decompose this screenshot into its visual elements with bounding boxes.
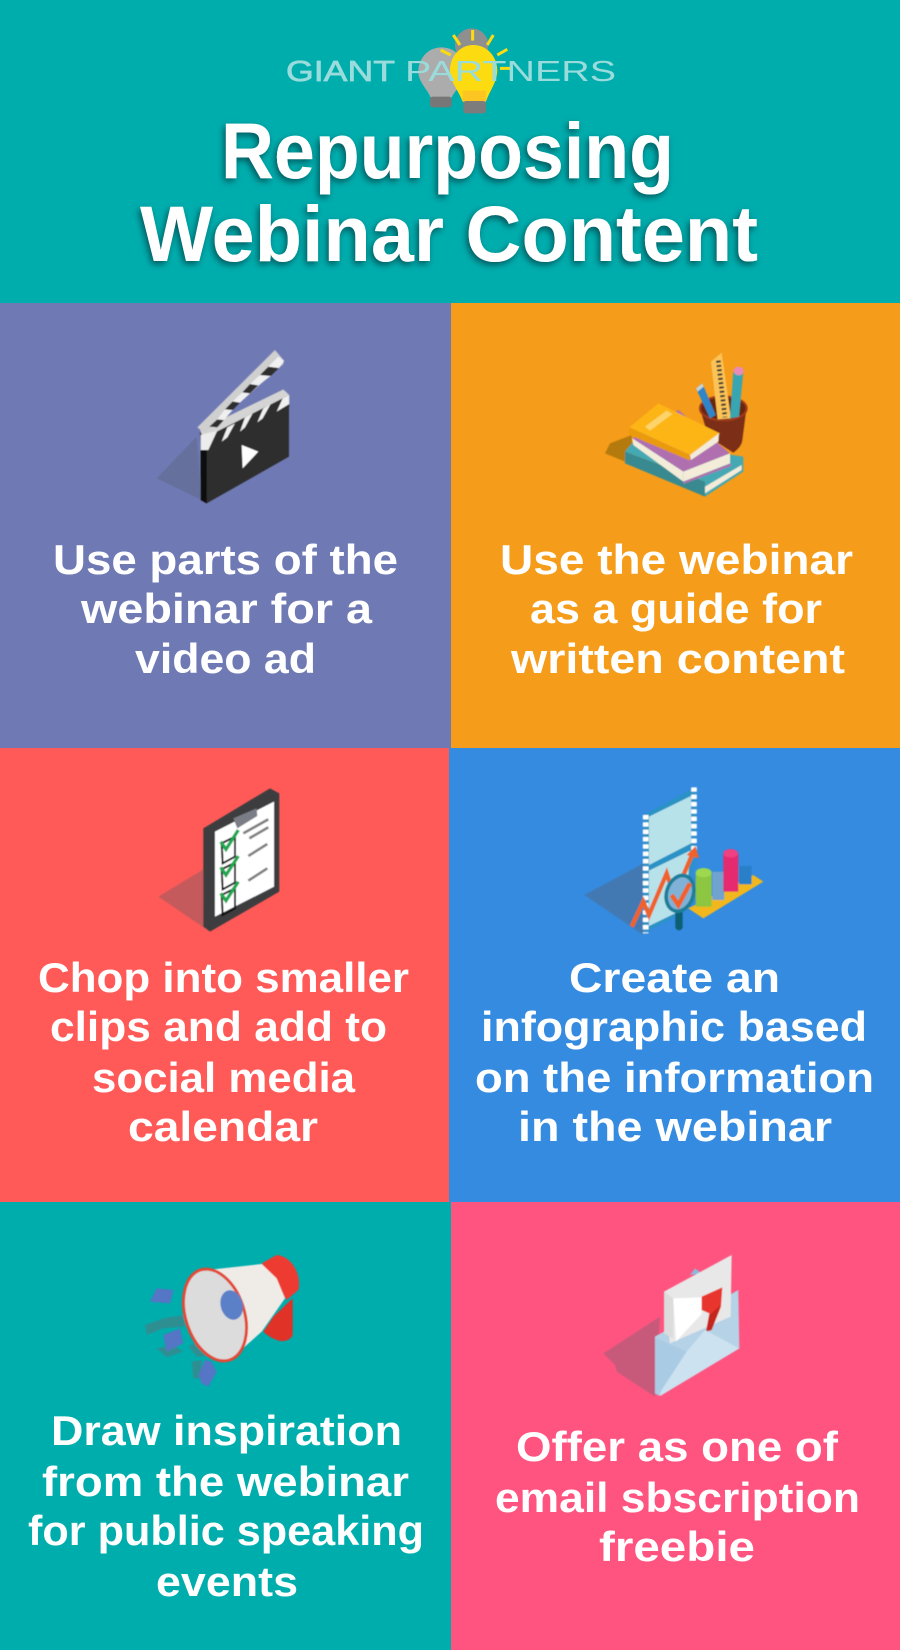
text: written content: written content [510, 635, 845, 682]
icon: checklist clipboard [158, 788, 279, 932]
text: video ad [53, 536, 398, 682]
text: public speaking: from the webinar [42, 1458, 409, 1505]
text: public speaking: for public speaking [28, 1507, 424, 1554]
icon: clapperboard [157, 350, 289, 503]
text: public speaking [28, 1407, 424, 1605]
text: social clips: Chop into smaller [38, 954, 409, 1001]
logo: GIANT [286, 56, 395, 88]
text: email freebie: freebie [599, 1523, 755, 1570]
icon: megaphone [145, 1255, 299, 1387]
text: public speaking: events [156, 1558, 298, 1605]
title [140, 106, 758, 278]
text: infographic [475, 954, 874, 1150]
text: social clips: calendar [128, 1103, 318, 1150]
text: email freebie: email sbscription [495, 1474, 860, 1521]
icon: film strip and chart [584, 787, 763, 935]
text: public speaking: Draw inspiration [51, 1407, 402, 1454]
icon: books and pencil cup [605, 353, 747, 497]
text: infographic: infographic based [481, 1003, 867, 1050]
text: email freebie [495, 1423, 860, 1570]
header panel [0, 0, 900, 303]
text: email freebie: Offer as one of [516, 1423, 839, 1470]
text: social clips: social media [92, 1054, 356, 1101]
icon: envelope with letter [603, 1255, 739, 1397]
text: social clips [38, 954, 409, 1150]
text: video ad: Use parts of the [53, 536, 398, 583]
title: Repurposing [221, 106, 674, 195]
panel: public speaking [0, 1202, 451, 1650]
text: infographic: Create an [569, 954, 780, 1001]
text: infographic: in the webinar [518, 1103, 832, 1150]
text: infographic: on the information [475, 1054, 874, 1101]
text: video ad: video ad [135, 635, 316, 682]
panel: video ad [0, 303, 451, 748]
panel: written content [451, 303, 900, 748]
text: social clips: clips and add to [50, 1003, 387, 1050]
logo [286, 28, 616, 113]
title: Webinar Content [140, 189, 758, 278]
text: video ad: webinar for a [80, 585, 373, 632]
text: written content: as a guide for [530, 585, 822, 632]
logo: PARTNERS [405, 56, 616, 88]
text: written content: Use the webinar [500, 536, 853, 583]
panel: email freebie [451, 1202, 900, 1650]
text: written content [500, 536, 853, 682]
panel: infographic [449, 748, 900, 1202]
panel: social clips [0, 748, 449, 1202]
